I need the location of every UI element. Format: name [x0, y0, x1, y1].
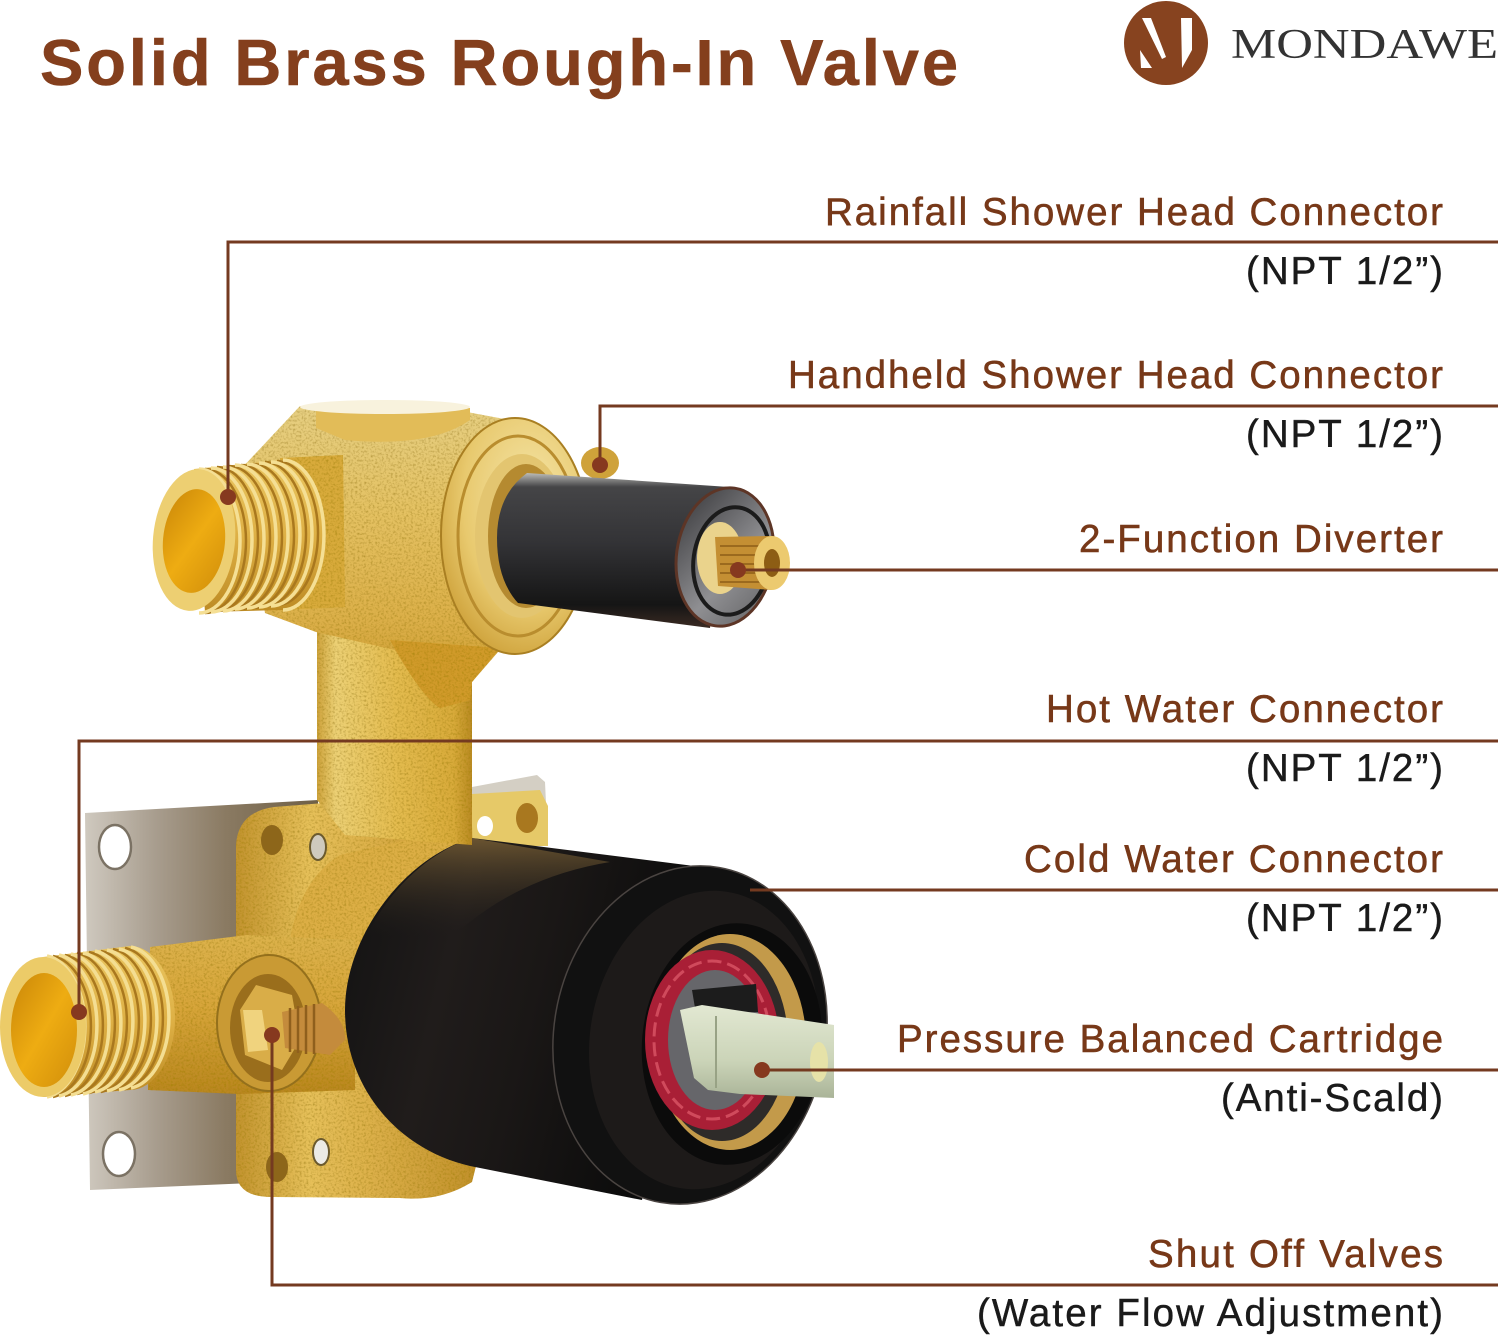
- label: Handheld Shower Head Connector: [788, 354, 1443, 397]
- label: Rainfall Shower Head Connector: [825, 191, 1443, 234]
- logo mark: [1124, 1, 1208, 85]
- marker dot: [592, 457, 608, 473]
- callout: 2-function diverter: [730, 518, 1498, 578]
- spec: (Water Flow Adjustment): [977, 1292, 1443, 1335]
- rainfall outlet opening: [147, 466, 241, 614]
- spec: (NPT 1/2”): [1246, 747, 1443, 790]
- horizontal inlet body: [148, 935, 355, 1094]
- cartridge stem: [680, 984, 834, 1098]
- diverter end disc: [666, 480, 784, 634]
- diagonal brass shoulder: [290, 826, 480, 1000]
- label: Pressure Balanced Cartridge: [897, 1018, 1443, 1061]
- diverter black sleeve: [497, 473, 729, 628]
- lower inlet opening: [0, 957, 86, 1097]
- logo: Mondawe: [1124, 1, 1498, 85]
- vertical neck: [317, 620, 472, 845]
- callout: rainfall shower head connector: [220, 191, 1498, 505]
- spec: (NPT 1/2”): [1246, 413, 1443, 456]
- callout: cold water connector: [750, 838, 1498, 940]
- marker dot: [264, 1027, 280, 1043]
- illustration: lower valve body: [0, 775, 853, 1226]
- main casting: [240, 406, 530, 708]
- callout: hot water connector: [71, 688, 1498, 1020]
- label: Hot Water Connector: [1046, 688, 1443, 731]
- shut-off screw stem: [282, 1003, 345, 1055]
- mounting plate: left steel: [85, 800, 320, 1190]
- brass mount frame: [236, 802, 480, 1199]
- shut-off hex flange: [217, 955, 321, 1091]
- leader line: [738, 568, 1498, 572]
- leader line: [79, 741, 1498, 1012]
- frame screw holes: [261, 825, 329, 1182]
- lower inlet thread: [43, 946, 175, 1097]
- marker dot: [754, 1062, 770, 1078]
- label: Shut Off Valves: [1148, 1233, 1443, 1276]
- cartridge housing: black cylinder: [345, 838, 702, 1200]
- cartridge opening: [632, 916, 832, 1172]
- cylinder front flange: [527, 844, 853, 1226]
- callout: pressure balanced cartridge: [754, 1018, 1498, 1120]
- rainfall outlet thread: [194, 460, 324, 613]
- gusset shadow: [390, 640, 500, 708]
- plate mounting holes: [99, 825, 135, 1176]
- leader line: [600, 406, 1498, 465]
- spec: (NPT 1/2”): [1246, 897, 1443, 940]
- leader line: [272, 1035, 1498, 1285]
- leader line: [750, 888, 1498, 892]
- outlet boss block: [280, 455, 345, 610]
- leader line: [228, 242, 1498, 497]
- spec: (Anti-Scald): [1221, 1077, 1443, 1120]
- label: 2-Function Diverter: [1079, 518, 1443, 561]
- cylinder top sheen: [350, 838, 610, 1002]
- spec: (NPT 1/2”): [1246, 250, 1443, 293]
- logo wordmark: MONDAWE: [1231, 22, 1498, 68]
- mounting plate: right tab: [472, 775, 548, 846]
- diverter back nub: [581, 447, 619, 479]
- callout: handheld shower head connector: [592, 354, 1498, 473]
- marker dot: [71, 1004, 87, 1020]
- red cartridge ring: [645, 950, 779, 1130]
- title: Solid Brass Rough-In Valve: [40, 26, 958, 99]
- illustration: upper valve body: [147, 400, 790, 845]
- diverter gold spline: [697, 522, 790, 594]
- callout: shut off valves: [264, 1027, 1498, 1335]
- leader line: [762, 1068, 1498, 1072]
- marker dot: [220, 489, 236, 505]
- marker dot: [730, 562, 746, 578]
- top boss: [300, 400, 470, 442]
- label: Cold Water Connector: [1024, 838, 1443, 881]
- flange: [441, 418, 589, 654]
